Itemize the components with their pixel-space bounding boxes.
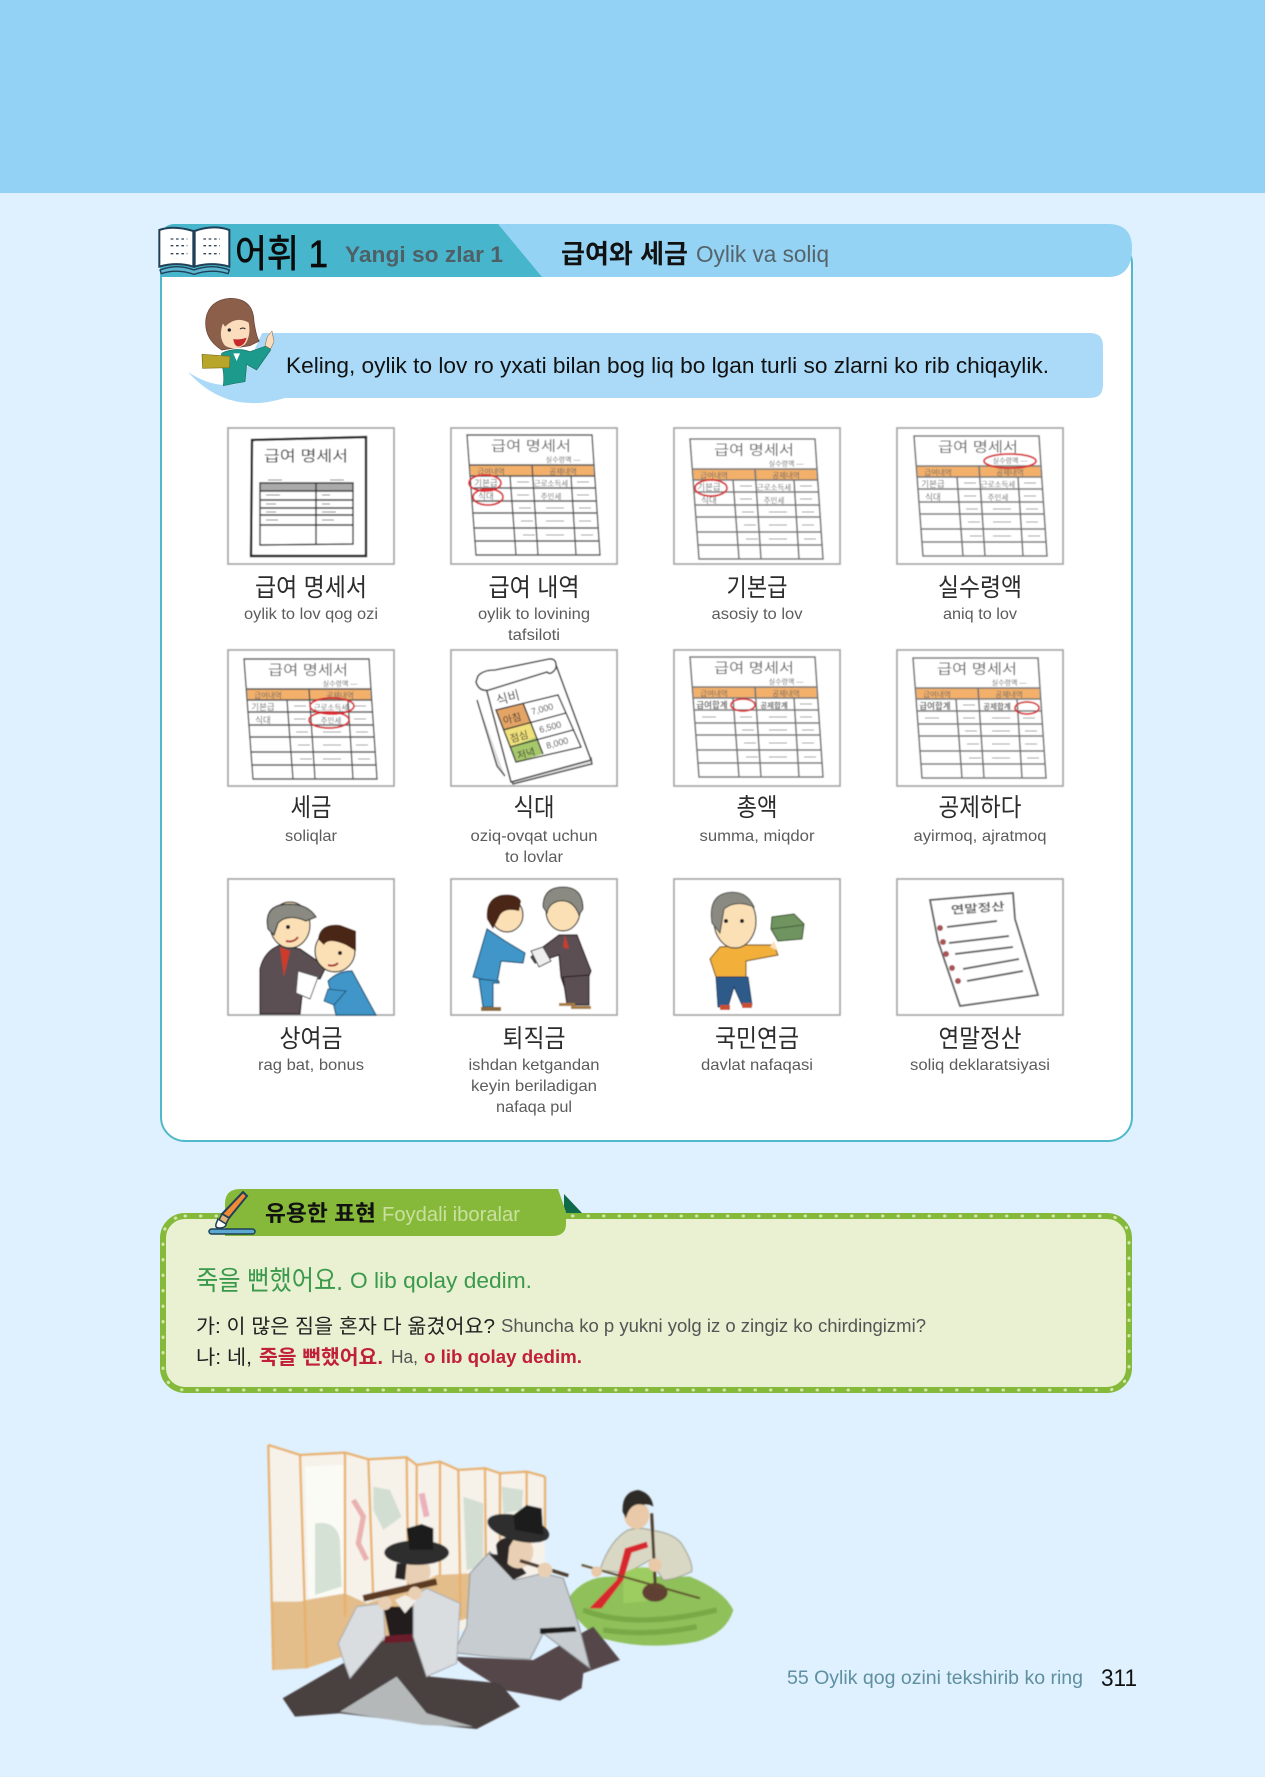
image: notebook with meal costs: 7,000	[530, 701, 554, 717]
image: notebook with meal costs: 점심	[509, 729, 530, 745]
card: deduct	[897, 650, 1063, 845]
image: boss handing bonus envelope	[228, 879, 394, 1015]
translation: to lovlar	[505, 849, 564, 866]
icon: paintbrush	[209, 1192, 255, 1234]
image: pay slip total circled: 급여합계	[696, 700, 728, 710]
heading: useful expressions korean: 유용한 표현	[265, 1201, 376, 1226]
folding screen	[268, 1445, 545, 1670]
green dotted box	[163, 1216, 1129, 1390]
image: notebook with meal costs	[451, 650, 617, 786]
image: pay slip net pay circled: 근로소득세	[981, 480, 1015, 489]
translation: summa, miqdor	[700, 828, 815, 845]
card: pay slip	[228, 428, 394, 623]
image: pay slip with circled items: 근로소득세	[534, 479, 568, 488]
translation: keyin beriladigan	[471, 1078, 597, 1095]
heading: useful expressions uzbek: Foydali iboralar	[382, 1204, 520, 1226]
panel: useful expressions	[163, 1189, 1129, 1390]
dialogue line 2: 나: 네,	[196, 1346, 252, 1369]
image: pay slip with circled items: 급여내역	[477, 466, 505, 476]
translation: aniq to lov	[943, 606, 1017, 623]
image: pay slip deduction circled: 급여합계	[919, 701, 951, 711]
image: pay slip total circled: 급여내역	[700, 688, 728, 698]
word: 기본급: 기본급	[726, 574, 788, 602]
heading: topic korean: 급여와 세금	[561, 239, 688, 269]
dialogue line 1	[196, 1315, 926, 1338]
image: pay slip total circled: 실수령액 —	[769, 677, 803, 686]
image: blank pay slip sketch: 급여 명세서	[264, 448, 348, 465]
image: pay slip taxes circled: 급여내역	[254, 690, 282, 700]
translation: rag bat, bonus	[258, 1057, 364, 1074]
dialogue line 1: 가: 이 많은 짐을 혼자 다 옮겼어요?	[196, 1315, 495, 1338]
translation	[478, 606, 590, 644]
image: pay slip net pay circled: 실수령액 —	[993, 456, 1027, 465]
image: pay slip base pay circled: 식대	[701, 495, 717, 505]
dialogue line 1: Shuncha ko p yukni yolg iz o zingiz ko chirdingizmi?	[501, 1315, 926, 1336]
panel outline	[161, 240, 1132, 1141]
image: pay slip taxes circled: 근로소득세	[314, 703, 348, 712]
image: pay slip with circled items: 기본급	[474, 478, 498, 488]
image: pay slip net pay circled: 급여 명세서	[938, 439, 1018, 455]
image: pay slip base pay circled: 주민세	[764, 495, 784, 505]
translation: ayirmoq, ajratmoq	[914, 828, 1046, 845]
image: pay slip base pay circled: 실수령액 —	[769, 459, 803, 468]
image: old man holding money	[674, 879, 840, 1015]
image: pay slip taxes circled: 급여 명세서	[268, 662, 348, 678]
expression title: O lib qolay dedim.	[350, 1268, 532, 1293]
word: 상여금: 상여금	[280, 1025, 342, 1053]
card: pay details	[451, 428, 617, 644]
image: pay slip total circled: 급여 명세서	[714, 660, 794, 676]
image: pay slip with circled items: 급여 명세서	[491, 438, 571, 454]
image: pay slip taxes circled: 공제내역	[326, 690, 354, 700]
card: taxes	[228, 650, 394, 845]
image: pay slip base pay circled: 급여내역	[700, 470, 728, 480]
expression title: 죽을 뻔했어요.	[196, 1266, 343, 1296]
heading: topic uzbek: Oylik va soliq	[696, 241, 829, 267]
image: pay slip deduction circled: 급여 명세서	[937, 661, 1017, 677]
panel: vocabulary	[159, 224, 1132, 1141]
card: year-end tax settlement	[897, 879, 1063, 1074]
image: pay slip taxes circled: 기본급	[251, 702, 275, 712]
image: pay slip base pay circled: 근로소득세	[757, 483, 791, 492]
image: blank pay slip sketch	[228, 428, 394, 564]
image: pay slip net pay circled: 공제내역	[996, 467, 1024, 477]
translation: nafaqa pul	[496, 1099, 572, 1116]
icon: teacher mascot	[202, 298, 274, 386]
image: notebook with meal costs: 아침	[502, 711, 523, 727]
translation: soliqlar	[285, 828, 338, 845]
translation: oylik to lovining	[478, 606, 590, 623]
first flute player	[283, 1524, 520, 1729]
translation: asosiy to lov	[712, 606, 802, 623]
illustration: traditional musicians	[268, 1445, 733, 1729]
expression title	[196, 1266, 532, 1296]
image: notebook with meal costs: 식비	[494, 687, 521, 708]
dialogue line 2	[196, 1346, 582, 1369]
image: notebook with meal costs: 저녁	[516, 746, 537, 762]
footer: chapter title: 55 Oylik qog ozini tekshirib ko ring	[787, 1668, 1083, 1689]
image: pay slip net pay circled: 급여내역	[924, 467, 952, 477]
second flute player	[453, 1505, 620, 1701]
speech bubble	[188, 333, 1103, 403]
translation	[468, 1057, 600, 1116]
translation	[470, 828, 598, 866]
image: pay slip base pay circled: 공제내역	[772, 470, 800, 480]
image: notebook with meal costs: 6,500	[538, 719, 562, 735]
image: two men exchanging document	[451, 879, 617, 1015]
image: checklist paper	[897, 879, 1063, 1015]
tab	[225, 1189, 566, 1236]
translation: oziq-ovqat uchun	[470, 828, 598, 845]
word: 급여 내역: 급여 내역	[488, 574, 580, 602]
word: 공제하다: 공제하다	[938, 794, 1022, 822]
image: pay slip net pay circled: 주민세	[988, 492, 1008, 502]
image: pay slip with circled items: 식대	[478, 491, 494, 501]
image: pay slip with circled items: 실수령액 —	[546, 455, 580, 464]
dialogue line 2: 죽을 뻔했어요.	[259, 1346, 383, 1369]
word: 세금: 세금	[290, 794, 332, 822]
bubble text: Keling, oylik to lov ro yxati bilan bog liq bo lgan turli so zlarni ko rib chiqaylik.	[286, 353, 1049, 378]
word: 국민연금: 국민연금	[715, 1025, 799, 1053]
image: checklist paper: 연말정산	[950, 899, 1005, 917]
image: pay slip with circled items: 공제내역	[549, 466, 577, 476]
image: pay slip with circled items	[451, 428, 617, 564]
icon: open book	[159, 227, 229, 274]
image: pay slip total circled	[674, 650, 840, 786]
word: 퇴직금: 퇴직금	[502, 1025, 566, 1053]
image: pay slip with circled items: 주민세	[541, 491, 561, 501]
translation: tafsiloti	[508, 627, 560, 644]
card: bonus	[228, 879, 394, 1074]
image: pay slip taxes circled: 주민세	[321, 715, 341, 725]
translation: ishdan ketgandan	[468, 1057, 600, 1074]
word: 실수령액: 실수령액	[938, 574, 1022, 602]
word: 식대: 식대	[514, 794, 554, 822]
image: pay slip deduction circled: 실수령액 —	[992, 678, 1026, 687]
image: pay slip taxes circled: 식대	[255, 715, 271, 725]
woman with haegeum	[568, 1490, 733, 1646]
image: pay slip deduction circled	[897, 650, 1063, 786]
heading: Yangi so zlar 1: Yangi so zlar 1	[345, 242, 503, 267]
image: pay slip net pay circled: 식대	[925, 492, 941, 502]
translation: davlat nafaqasi	[701, 1057, 813, 1074]
card: net pay	[897, 428, 1063, 623]
image: pay slip net pay circled	[897, 428, 1063, 564]
translation: oylik to lov qog ozi	[244, 606, 378, 623]
header teal tab	[161, 224, 542, 277]
card: total	[674, 650, 840, 845]
top blue band	[0, 0, 1265, 193]
image: pay slip taxes circled	[228, 650, 394, 786]
heading: vocabulary 1: 어휘 1	[235, 234, 328, 276]
word: 연말정산: 연말정산	[938, 1025, 1022, 1053]
image: pay slip base pay circled: 급여 명세서	[714, 442, 794, 458]
image: pay slip total circled: 공제내역	[772, 688, 800, 698]
image: pay slip base pay circled	[674, 428, 840, 564]
image: pay slip taxes circled: 실수령액 —	[323, 679, 357, 688]
word: 급여 명세서: 급여 명세서	[255, 574, 367, 602]
page number: 311	[1101, 1665, 1137, 1692]
header bar	[161, 224, 1132, 277]
image: pay slip deduction circled: 공제합계	[983, 701, 1011, 711]
word: 총액: 총액	[736, 794, 778, 822]
image: pay slip base pay circled: 기본급	[697, 482, 721, 492]
translation: soliq deklaratsiyasi	[910, 1057, 1050, 1074]
image: pay slip net pay circled: 기본급	[921, 479, 945, 489]
tab corner	[564, 1194, 582, 1213]
image: pay slip deduction circled: 공제내역	[995, 689, 1023, 699]
card: meal allowance	[451, 650, 617, 866]
dialogue line 2: Ha,	[391, 1346, 418, 1367]
image: notebook with meal costs: 8,000	[545, 735, 569, 751]
dialogue line 2: o lib qolay dedim.	[424, 1346, 582, 1367]
card: severance pay	[451, 879, 617, 1116]
image: pay slip deduction circled: 급여내역	[923, 689, 951, 699]
image: pay slip total circled: 공제합계	[760, 700, 788, 710]
card: base pay	[674, 428, 840, 623]
card: national pension	[674, 879, 840, 1074]
